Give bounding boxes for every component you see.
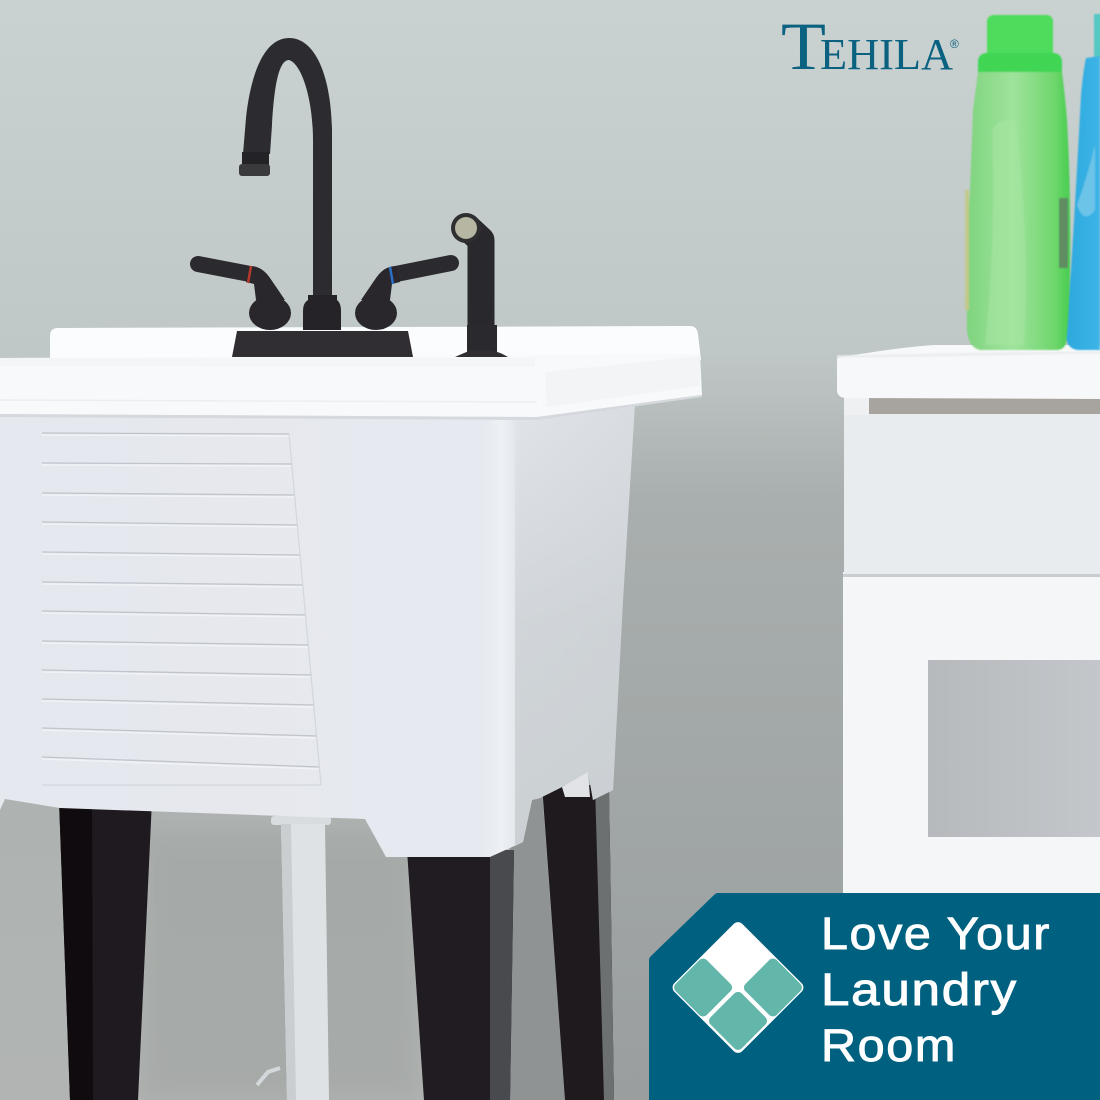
- countertop shadow: [869, 398, 1100, 414]
- banner panel: [649, 893, 1100, 1100]
- faucet spout: [239, 38, 332, 300]
- sink overflow stub: [562, 772, 590, 797]
- cabinet frosted window: [928, 660, 1100, 837]
- sink rim: [0, 326, 702, 420]
- cabinet: [837, 345, 1100, 897]
- countertop: [837, 345, 1100, 399]
- center hub: [303, 295, 341, 330]
- sink basin: [0, 404, 635, 857]
- washboard ribs: [42, 433, 321, 785]
- left handle: [198, 264, 291, 330]
- Tehila brand logo: [781, 8, 959, 84]
- side sprayer: [451, 213, 508, 357]
- Tehila brand logo: ®: [950, 37, 959, 51]
- banner: [649, 893, 1100, 1100]
- icon: tile diamond: [670, 920, 806, 1055]
- faucet base: [232, 331, 413, 357]
- sink legs: [59, 785, 614, 1100]
- cabinet drawer: [844, 412, 1100, 575]
- faucet: [198, 38, 508, 357]
- drain pipe: [257, 816, 331, 1100]
- right handle: [355, 263, 451, 330]
- banner heading: [821, 908, 1051, 1071]
- Tehila brand logo: EHILA: [820, 30, 953, 79]
- banner heading: Room: [821, 1020, 957, 1071]
- Tehila brand logo: T: [781, 8, 826, 84]
- banner heading: Laundry: [821, 964, 1018, 1015]
- green bottle: [965, 15, 1070, 350]
- banner heading: Love Your: [821, 908, 1051, 959]
- cabinet lower panel: [843, 572, 1100, 897]
- blue bottle: [1065, 14, 1100, 350]
